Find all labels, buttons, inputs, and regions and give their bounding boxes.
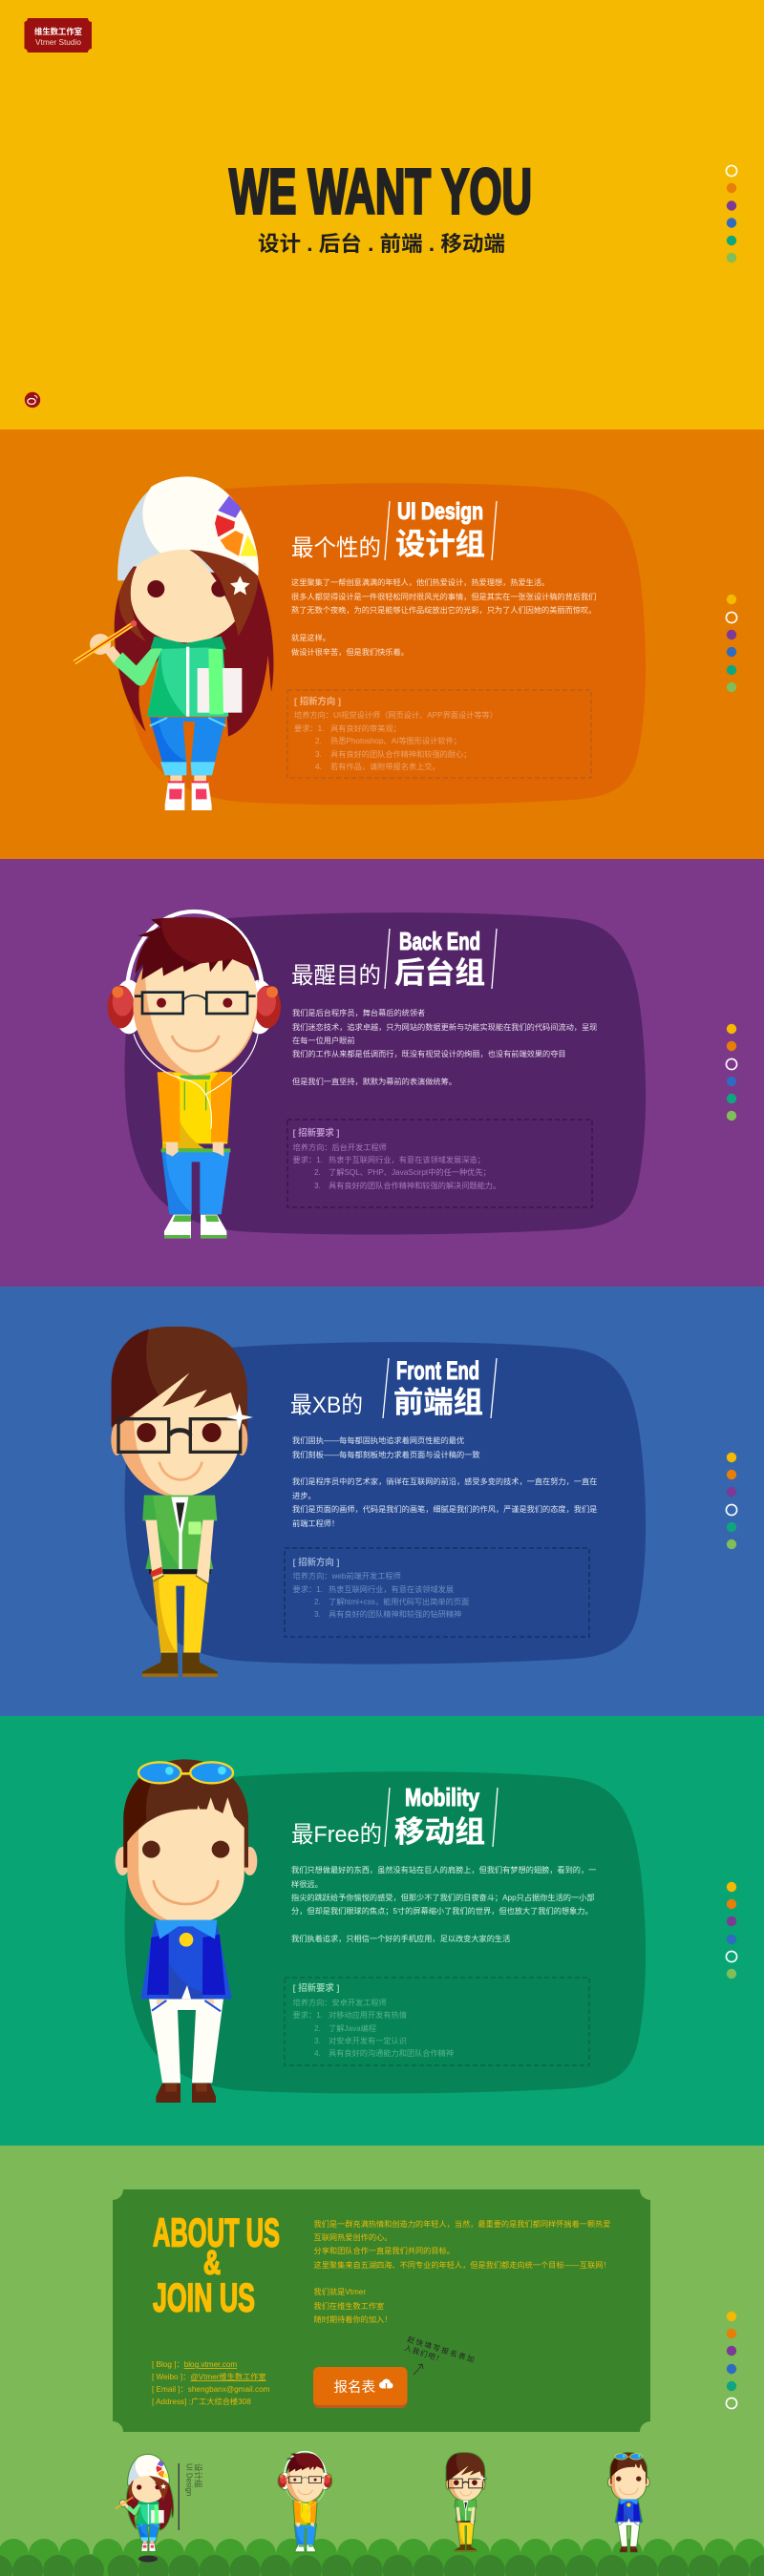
text: design intro: 很多人都觉得设计是一件很轻松同时很风光的事情，但是其实在一张张设计稿的背后我们 — [291, 592, 596, 601]
box: back end recruiting: 3. — [314, 1182, 321, 1190]
box: back end recruiting: 了解SQL、PHP、JavaScirpt中的任一种优先； — [329, 1167, 491, 1177]
box: mobile recruiting: 具有良好的沟通能力和团队合作精神 — [329, 2048, 454, 2058]
text: about intro — [313, 2219, 611, 2324]
mini label: design group: UI Design — [185, 2463, 193, 2496]
box: front end recruiting: 要求：1. — [292, 1584, 323, 1594]
text: back end intro: 在每一位用户眼前 — [292, 1036, 355, 1045]
box: design recruiting: 要求：1. — [294, 723, 324, 733]
box: design recruiting: 具有良好的审美观； — [330, 723, 401, 733]
box: design recruiting: 2. — [315, 737, 322, 745]
box: front end recruiting: 2. — [314, 1598, 321, 1606]
text: contact info: [ Weibo ]：@Vtmer维生数工作室 — [152, 2372, 266, 2381]
boots — [142, 1653, 218, 1677]
text: mobile intro: 我们执着追求，只相信一个好的手机应用，足以改变大家的生活 — [291, 1934, 510, 1943]
text: contact info: [ Blog ]：blog.vtmer.com — [152, 2360, 237, 2369]
box: design recruiting: 培养方向：UI视觉设计师（网页设计、APP界面设计等等） — [294, 710, 498, 720]
panel: about us — [113, 2189, 650, 2432]
box: back end recruiting: 培养方向：后台开发工程师 — [292, 1142, 387, 1152]
box: mobile recruiting: 4. — [314, 2049, 321, 2058]
ears — [116, 1847, 257, 1875]
mini label: design group — [178, 2463, 202, 2530]
nav dots: about — [726, 2312, 737, 2409]
hair — [112, 1327, 247, 1434]
heading: about us and join us: JOIN US — [153, 2275, 255, 2319]
text: back end intro: 我们的工作从来都是低调而行，既没有视觉设计的绚丽，也没有前端效果的夺目 — [292, 1049, 566, 1058]
nav dots: front end — [726, 1453, 737, 1549]
box: mobile recruiting: 2. — [314, 2024, 321, 2033]
ears — [111, 1424, 247, 1456]
panel: mobile — [125, 1771, 646, 2094]
box: design recruiting: 具有良好的团队合作精神和较强的耐心； — [330, 749, 471, 759]
goggles — [138, 1762, 233, 1783]
heading: back end: 后台组 — [394, 956, 485, 990]
heading: about us and join us — [153, 2210, 280, 2319]
heading: mobile: 移动组 — [394, 1815, 485, 1849]
box: front end recruiting: 了解html+css，能用代码写出简单的页面 — [329, 1597, 469, 1606]
box: mobile recruiting — [285, 1978, 589, 2065]
nav dots: mobile — [726, 1882, 737, 1979]
button: sign-up form: 报名表 — [334, 2379, 375, 2396]
hair — [123, 1759, 248, 1868]
nav dots: design — [726, 595, 737, 692]
long hair — [115, 566, 273, 737]
icon: weibo — [25, 392, 40, 408]
box: back end recruiting: 要求：1. — [292, 1155, 323, 1164]
heading: front end: 前端组 — [393, 1386, 483, 1419]
text: design intro: 就是这样。 — [291, 633, 330, 642]
text: about intro: 互联网热爱创作的心。 — [313, 2232, 392, 2242]
box: front end recruiting: 具有良好的团队精神和较强的钻研精神 — [329, 1609, 461, 1619]
text: back end intro: 我们迷恋技术，追求卓越，只为网站的数据更新与功能实现能在我们的代码间流动，呈现 — [292, 1022, 597, 1032]
mini label: design group: 设计组 — [193, 2463, 202, 2488]
head — [133, 935, 257, 1076]
text: mobile intro: 分，但却是我们眼球的焦点；5寸的屏幕缩小了我们的世界，但也放大了我们的想象力。 — [291, 1906, 593, 1916]
text: design intro: 熬了无数个夜晚，为的只是能够让作品绽放出它的光彩，只为了人们因她的美丽而惊叹。 — [291, 605, 596, 615]
shirt — [142, 1496, 217, 1569]
box: design recruiting: 3. — [315, 750, 322, 759]
text: mobile intro: 指尖的跳跃给予你愉悦的感受，但那少不了我们的日夜奋斗；App只占据你生活的一小部 — [291, 1893, 595, 1902]
box: front end recruiting: [ 招新方向 ] — [292, 1557, 339, 1567]
text: about intro: 随时期待着你的加入！ — [313, 2314, 392, 2324]
heading: about us and join us: ABOUT US — [153, 2210, 280, 2254]
text: front end intro — [292, 1435, 597, 1528]
headphones — [108, 911, 281, 1034]
section: about light green — [0, 2146, 764, 2576]
section: back end purple — [0, 859, 764, 1287]
mini character: shadow ellipse — [138, 2556, 158, 2562]
box: mobile recruiting: 3. — [314, 2037, 321, 2045]
fringe — [118, 550, 258, 642]
box: design recruiting: 熟悉Photoshop、AI等图形设计软件； — [330, 736, 461, 745]
box: mobile recruiting: 对安卓开发有一定认识 — [329, 2036, 407, 2045]
text: front end intro: 我们固执——每每都固执地追求着网页性能的最优 — [292, 1435, 464, 1445]
box: back end recruiting: 具有良好的团队合作精神和较强的解决问题能力。 — [329, 1181, 500, 1190]
text: about intro: 这里聚集来自五湖四海、不同专业的年轻人，但是我们都走向统一个目标——互联网！ — [313, 2260, 611, 2270]
box: mobile recruiting: 要求：1. — [292, 2010, 323, 2020]
mini character: mobile boy — [608, 2453, 649, 2552]
section: mobile green — [0, 1716, 764, 2146]
character: mobile boy — [116, 1759, 257, 2103]
heading: about us and join us: & — [203, 2245, 221, 2281]
character: back end boy — [108, 911, 281, 1238]
text: contact info — [152, 2360, 270, 2406]
box: back end recruiting: 2. — [314, 1168, 321, 1177]
text: about intro: 我们是一群充满热情和创造力的年轻人，当然，最重要的是我们都同样怀揣着一颗热爱 — [313, 2219, 611, 2229]
sparkle — [226, 1404, 253, 1431]
character: designer girl — [74, 476, 273, 810]
text: front end intro: 进步。 — [292, 1492, 316, 1500]
sneakers — [165, 781, 212, 810]
panel: design — [125, 483, 646, 806]
heading: design: 最个性的 — [291, 535, 381, 561]
hoodie — [158, 1072, 232, 1157]
logo: 维生数工作室 — [34, 27, 82, 36]
grass scallops front row — [0, 2555, 764, 2576]
arrow — [414, 2364, 423, 2375]
text: design intro: 做设计很辛苦，但是我们快乐着。 — [291, 647, 409, 657]
box: design recruiting: [ 招新方向 ] — [294, 696, 341, 706]
section: design orange — [0, 429, 764, 859]
button: sign-up form — [313, 2367, 407, 2408]
hat — [117, 476, 259, 580]
arms and belt — [145, 1520, 214, 1582]
heading: mobile: Mobility — [405, 1783, 479, 1812]
face — [117, 1373, 242, 1497]
text: about intro: 分享和团队合作一直是我们共同的目标。 — [313, 2246, 455, 2255]
shoes — [156, 2084, 216, 2103]
mini character: front end boy — [446, 2453, 486, 2551]
section: hero yellow — [0, 0, 764, 429]
box: back end recruiting: 热衷于互联网行业，有意在该领域发展深造； — [329, 1155, 485, 1164]
hair — [136, 917, 259, 983]
section: front end blue — [0, 1287, 764, 1716]
heading: mobile — [291, 1783, 498, 1849]
text: mobile intro — [291, 1865, 596, 1943]
panel: front end — [125, 1342, 646, 1665]
heading: mobile: 最Free的 — [291, 1822, 382, 1848]
text: front end intro: 前端工程师！ — [292, 1518, 339, 1528]
box: mobile recruiting: 培养方向：安卓开发工程师 — [292, 1998, 387, 2007]
logo — [25, 18, 92, 52]
text: front end intro: 我们刻板——每每都刻板地力求着页面与设计稿的一致 — [292, 1450, 480, 1459]
text: contact info: [ Email ]：shengbanx@gmail.com — [152, 2385, 270, 2394]
box: front end recruiting: 3. — [314, 1610, 321, 1619]
heading: back end: 最醒目的 — [291, 963, 381, 989]
box: front end recruiting — [285, 1548, 589, 1637]
mini character: designer girl — [116, 2455, 173, 2551]
shoes — [164, 1215, 226, 1238]
pants — [161, 1152, 230, 1214]
box: back end recruiting: [ 招新要求 ] — [292, 1127, 339, 1138]
panel: back end — [125, 912, 646, 1235]
pants — [152, 1574, 208, 1653]
text: front end intro: 我们是程序员中的艺术家，徜徉在互联网的前沿，感受多变的技术，一直在努力，一直在 — [292, 1476, 597, 1486]
grass scallops back row — [0, 2539, 764, 2576]
glasses — [118, 1419, 241, 1452]
text: contact info: [ Address] :广工大综合楼308 — [152, 2397, 251, 2406]
heading: front end — [290, 1356, 497, 1419]
jeans — [150, 718, 226, 783]
box: mobile recruiting: 对移动应用开发有热情 — [329, 2010, 407, 2020]
heading: back end: Back End — [399, 927, 480, 955]
face — [127, 1797, 244, 1925]
text: mobile intro: 样很远。 — [291, 1879, 323, 1889]
text: back end intro: 但是我们一直坚持，默默为幕前的表演做统筹。 — [292, 1077, 456, 1086]
text: back end intro — [292, 1008, 597, 1086]
heading: front end: Front End — [396, 1356, 479, 1385]
handwritten note: 赶快填写报名表加 — [406, 2334, 476, 2364]
earphone wires — [134, 1034, 258, 1129]
box: mobile recruiting: 了解Java编程 — [329, 2023, 376, 2033]
blue blazer — [140, 1920, 232, 1999]
box: design recruiting — [287, 690, 591, 778]
box: back end recruiting — [287, 1120, 592, 1207]
box: front end recruiting: 热衷互联网行业，有意在该领域发展 — [329, 1584, 454, 1594]
subtitle: 设计 . 后台 . 前端 . 移动端 — [258, 232, 505, 256]
nav dots: hero — [726, 165, 737, 262]
nav dots: back end — [726, 1024, 737, 1120]
text: about intro: 我们在维生数工作室 — [313, 2301, 384, 2311]
white pants — [149, 1995, 223, 2083]
box: design recruiting: 若有作品，请附带报名表上交。 — [330, 762, 440, 771]
character: front end boy — [111, 1327, 253, 1677]
text: about intro: 我们就是Vtmer — [313, 2287, 366, 2296]
text: front end intro: 我们是页面的画师，代码是我们的画笔，细腻是我们的作风，严谨是我们的态度，我们是 — [292, 1504, 597, 1514]
text: back end intro: 我们是后台程序员，舞台幕后的统领者 — [292, 1008, 425, 1017]
jacket — [147, 637, 242, 717]
heading: design: 设计组 — [395, 528, 485, 561]
box: design recruiting: 4. — [315, 763, 322, 771]
box: front end recruiting: 培养方向：web前端开发工程师 — [292, 1571, 401, 1581]
arm and pencil — [74, 620, 162, 685]
box: mobile recruiting: [ 招新要求 ] — [292, 1982, 339, 1993]
face — [131, 550, 236, 642]
heading: back end — [291, 927, 497, 990]
text: design intro: 这里聚集了一帮创意满满的年轻人，他们热爱设计，热爱理想，热爱生活。 — [291, 577, 549, 587]
glasses — [135, 993, 256, 1014]
text: mobile intro: 我们只想做最好的东西，虽然没有站在巨人的肩膀上，但我们有梦想的翅膀，看到的，一 — [291, 1865, 596, 1874]
heading: design: UI Design — [397, 498, 483, 525]
logo: Vtmer Studio — [35, 37, 81, 47]
text: design intro — [291, 577, 596, 657]
mini character: back end boy — [278, 2452, 331, 2552]
handwritten note: 入我们吧！ — [403, 2342, 444, 2364]
heading: design — [291, 498, 497, 561]
main title: WE WANT YOU — [229, 157, 532, 227]
heading: front end: 最XB的 — [290, 1393, 363, 1418]
